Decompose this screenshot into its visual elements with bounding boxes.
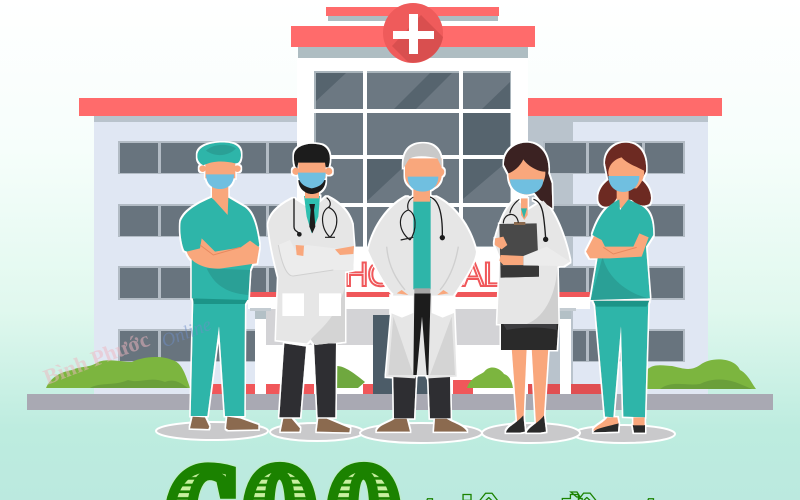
hospital sign: HOSPITAL — [344, 256, 502, 294]
figure: female doctor with clipboard — [494, 143, 570, 433]
figure: male doctor with beard — [268, 144, 354, 432]
central tower — [291, 7, 535, 395]
figure: senior doctor — [368, 143, 476, 432]
hospital building — [79, 3, 722, 396]
figure: nurse woman — [586, 143, 653, 433]
ground shadows — [156, 422, 675, 443]
medical cross emblem — [383, 3, 443, 63]
bushes — [46, 357, 756, 389]
watermark: Bình Phước — [40, 326, 153, 390]
figure: male nurse — [180, 142, 259, 430]
watermark — [40, 304, 214, 396]
pavement — [27, 394, 773, 410]
watermark: Online — [159, 314, 214, 352]
tower windows — [314, 71, 511, 247]
entrance — [212, 292, 607, 395]
left wing — [79, 98, 298, 396]
right wing — [528, 98, 722, 396]
